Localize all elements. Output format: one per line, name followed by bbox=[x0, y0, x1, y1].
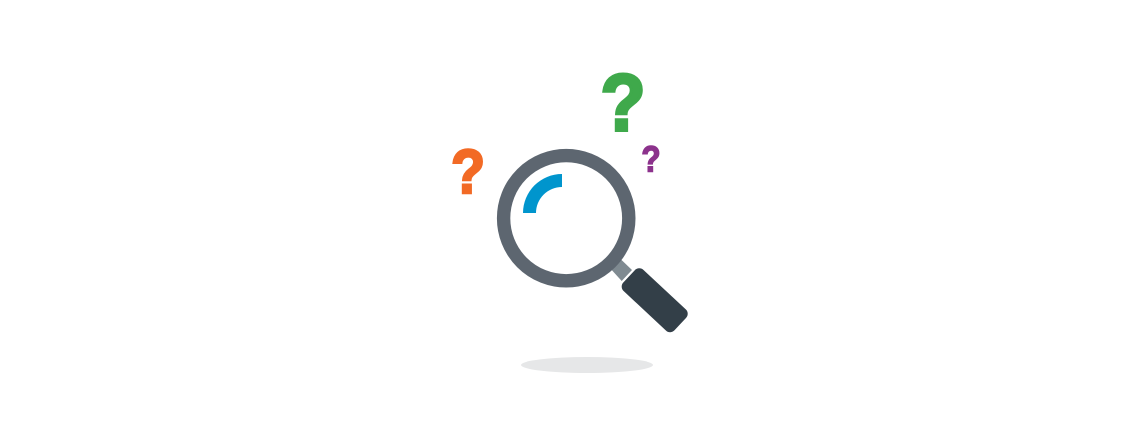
magnifier neck bbox=[609, 259, 632, 281]
magnifier handle bbox=[619, 266, 690, 335]
icon: magnifying glass bbox=[504, 156, 690, 335]
question mark: orange: ? bbox=[451, 136, 485, 207]
question mark: purple: ? bbox=[641, 139, 661, 180]
magnifier ring bbox=[504, 156, 629, 281]
question mark: green: ? bbox=[600, 59, 646, 148]
ground shadow bbox=[521, 357, 653, 373]
lens highlight arc bbox=[523, 174, 562, 213]
